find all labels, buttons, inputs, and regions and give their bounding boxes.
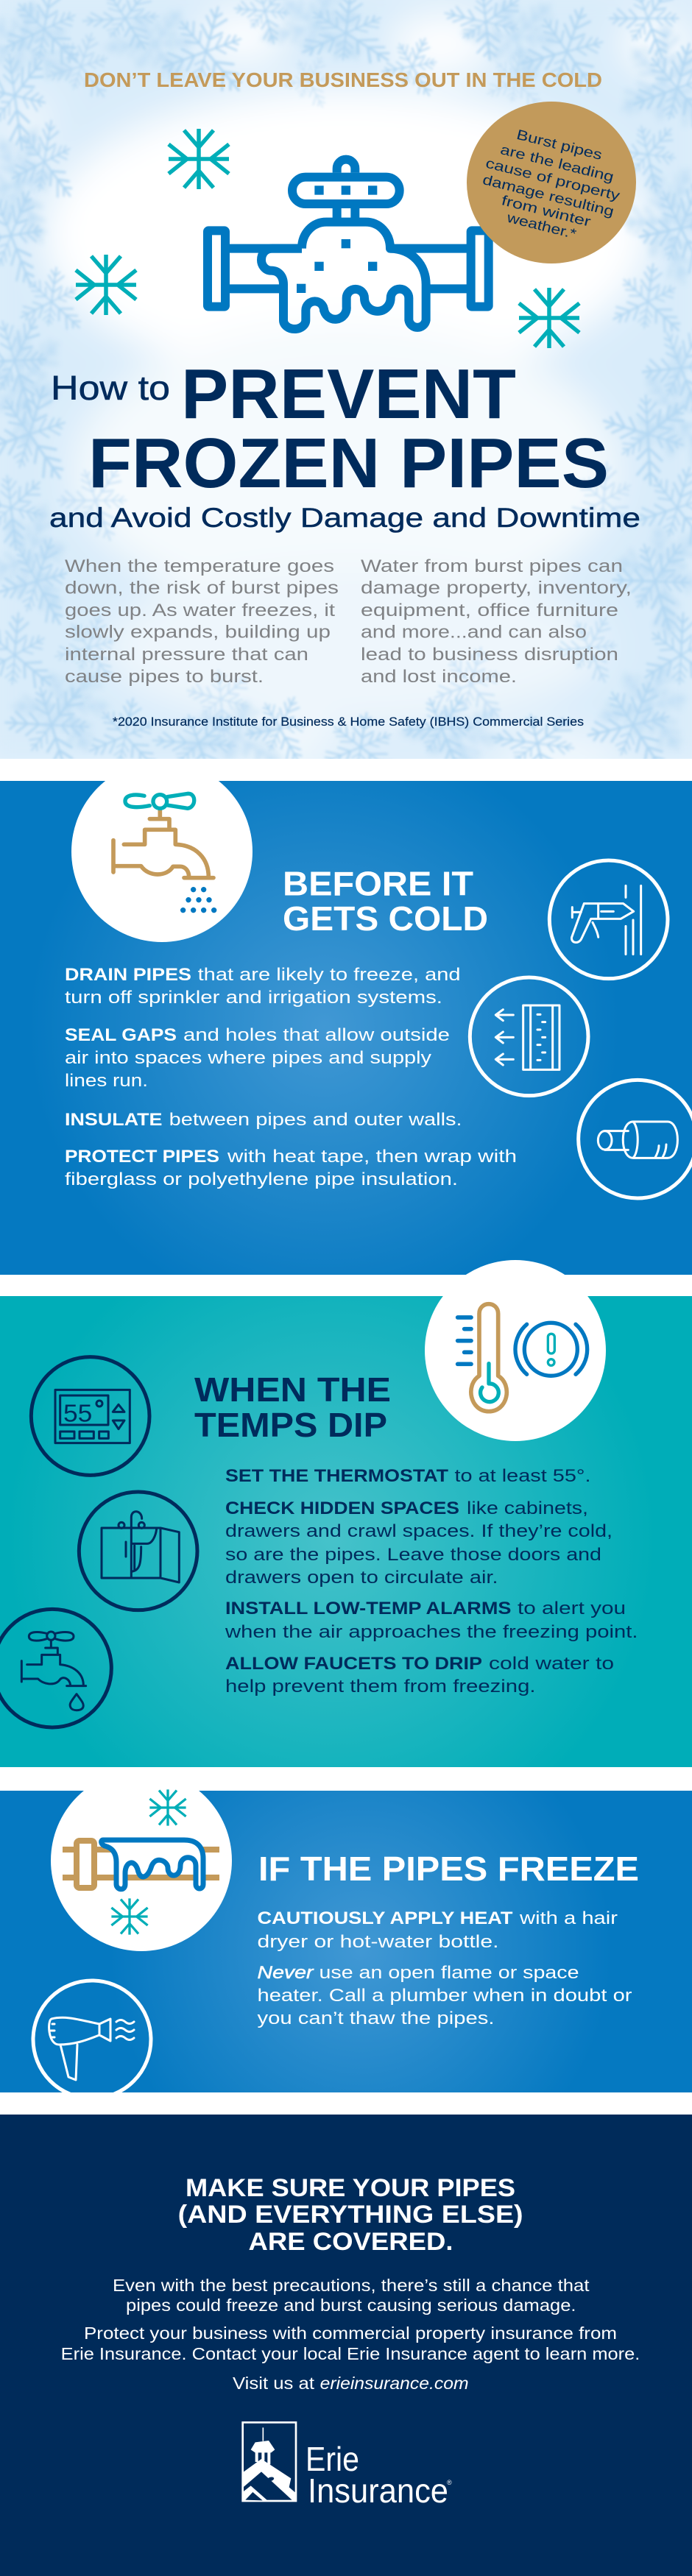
- text block: intro left: When the temperature goes: [65, 556, 334, 576]
- heading: WHEN THE: [194, 1370, 391, 1409]
- text block: coverage message: Visit us at: [233, 2374, 315, 2393]
- text block: thawing tips: with a hair: [519, 1908, 618, 1928]
- icon: thermostat: 55: [63, 1401, 92, 1428]
- text block: prevention tips: SEAL GAPS: [65, 1025, 177, 1045]
- icon: snowflake right: [519, 288, 579, 348]
- logo: Erie Insurance: Erie: [306, 2440, 359, 2478]
- text block: cold weather tips: help prevent them from freezing.: [225, 1677, 536, 1696]
- logo: Erie Insurance: ®: [447, 2479, 452, 2486]
- text block: intro right: Water from burst pipes can: [361, 556, 623, 576]
- text block: intro right: and more...and can also: [361, 623, 587, 642]
- icon: sink cabinet: [79, 1492, 197, 1610]
- text block: intro left: down, the risk of burst pipes: [65, 578, 339, 598]
- text block: coverage message: Even with the best precautions, there’s still a chance that: [113, 2276, 590, 2295]
- heading: (AND EVERYTHING ELSE): [178, 2201, 523, 2229]
- text block: thawing tips: [258, 1908, 632, 2028]
- callout: burst pipes statistic: damage resulting: [481, 172, 615, 220]
- panel: snowy header: [0, 0, 692, 790]
- text block: intro left: [65, 556, 339, 687]
- text block: intro left: goes up. As water freezes, it: [65, 601, 335, 620]
- title: PREVENT: [181, 355, 516, 434]
- icon: hair dryer: [33, 1981, 151, 2098]
- tagline: DON’T LEAVE YOUR BUSINESS OUT IN THE COLD: [84, 68, 602, 91]
- text block: cold weather tips: so are the pipes. Leave those doors and: [225, 1545, 601, 1565]
- heading: IF THE PIPES FREEZE: [258, 1850, 639, 1888]
- text block: prevention tips: INSULATE: [65, 1110, 162, 1130]
- text block: cold weather tips: INSTALL LOW-TEMP ALARMS: [225, 1599, 511, 1618]
- text block: prevention tips: DRAIN PIPES: [65, 965, 191, 985]
- text block: thawing tips: use an open flame or space: [319, 1963, 579, 1983]
- callout: burst pipes statistic: Burst pipes: [515, 127, 604, 163]
- icon: insulated pipe: [579, 1080, 692, 1198]
- text block: prevention tips: and holes that allow outside: [183, 1025, 450, 1045]
- text block: cold weather tips: drawers open to circulate air.: [225, 1568, 498, 1588]
- icon: dripping faucet: [0, 1609, 111, 1727]
- panel: before it gets cold: [0, 761, 692, 1275]
- text block: thawing tips: you can’t thaw the pipes.: [258, 2009, 495, 2028]
- text block: prevention tips: between pipes and outer walls.: [169, 1110, 462, 1130]
- text block: thawing tips: dryer or hot-water bottle.: [258, 1932, 499, 1952]
- text block: prevention tips: air into spaces where pipes and supply: [65, 1048, 432, 1068]
- title: [49, 355, 640, 533]
- text block: cold weather tips: ALLOW FAUCETS TO DRIP: [225, 1654, 482, 1674]
- text block: thawing tips: heater. Call a plumber when in doubt or: [258, 1986, 632, 2006]
- text block: intro right: and lost income.: [361, 667, 517, 687]
- heading: MAKE SURE YOUR PIPES: [186, 2174, 515, 2202]
- icon: burst pipe: [208, 160, 489, 329]
- heading: BEFORE IT: [283, 864, 473, 902]
- callout: burst pipes statistic: from winter: [500, 193, 593, 230]
- text block: prevention tips: fiberglass or polyethylene pipe insulation.: [65, 1170, 458, 1189]
- text block: thawing tips: CAUTIOUSLY APPLY HEAT: [258, 1908, 513, 1928]
- text block: intro right: [361, 556, 632, 687]
- logo: Erie Insurance: Insurance: [308, 2471, 448, 2510]
- logo: Erie Insurance: [243, 2422, 452, 2510]
- callout: burst pipes statistic: cause of property: [484, 156, 622, 204]
- callout: burst pipes statistic: are the leading: [498, 142, 615, 185]
- heading: TEMPS DIP: [194, 1406, 387, 1444]
- text block: cold weather tips: [225, 1466, 638, 1696]
- text block: intro left: cause pipes to burst.: [65, 667, 264, 687]
- title: How to: [51, 369, 170, 407]
- text block: prevention tips: with heat tape, then wrap with: [227, 1147, 517, 1167]
- panel: when the temps dip: [0, 1260, 692, 1767]
- text block: cold weather tips: like cabinets,: [467, 1498, 588, 1518]
- heading: GETS COLD: [283, 899, 488, 938]
- panel: coverage call to action: [0, 2115, 692, 2576]
- footnote: *2020 Insurance Institute for Business & Home Safety (IBHS) Commercial Series: [113, 715, 584, 729]
- icon: thermostat: [31, 1357, 149, 1475]
- title: FROZEN PIPES: [88, 424, 609, 503]
- icon: thermometer and alarm in white circle: [425, 1260, 606, 1441]
- text block: cold weather tips: to at least 55°.: [455, 1466, 590, 1486]
- text block: prevention tips: [65, 965, 517, 1189]
- text block: cold weather tips: cold water to: [489, 1654, 614, 1674]
- heading: ARE COVERED.: [249, 2228, 453, 2256]
- text block: prevention tips: PROTECT PIPES: [65, 1147, 219, 1167]
- icon: snowflake top: [169, 129, 229, 189]
- callout: burst pipes statistic: [467, 102, 636, 263]
- text block: coverage message: Protect your business with commercial property insurance from: [84, 2324, 617, 2343]
- icon: snowflake left: [76, 255, 136, 315]
- text block: prevention tips: lines run.: [65, 1071, 148, 1091]
- text block: cold weather tips: to alert you: [518, 1599, 626, 1618]
- frost background: [0, 0, 692, 790]
- title: and Avoid Costly Damage and Downtime: [49, 503, 640, 533]
- text block: cold weather tips: when the air approaches the freezing point.: [225, 1622, 638, 1642]
- icon: caulk gun: [549, 860, 668, 979]
- panel: if the pipes freeze: [0, 1770, 692, 2098]
- heading: [194, 1370, 391, 1444]
- callout: burst pipes statistic: weather.*: [504, 210, 578, 242]
- text block: coverage message: [61, 2276, 640, 2393]
- icon: wall insulation: [470, 977, 588, 1096]
- text block: cold weather tips: drawers and crawl spaces. If they’re cold,: [225, 1521, 612, 1541]
- heading: [283, 864, 488, 938]
- text block: intro left: internal pressure that can: [65, 645, 308, 665]
- text block: coverage message: erieinsurance.com: [320, 2374, 469, 2393]
- text block: thawing tips: Never: [258, 1963, 314, 1983]
- text block: intro right: lead to business disruption: [361, 645, 618, 665]
- icon: frozen pipe in white circle: [51, 1770, 232, 1951]
- text block: prevention tips: turn off sprinkler and irrigation systems.: [65, 988, 442, 1008]
- text block: intro right: damage property, inventory,: [361, 578, 632, 598]
- text block: intro left: slowly expands, building up: [65, 623, 331, 642]
- text block: coverage message: Erie Insurance. Contact your local Erie Insurance agent to learn more.: [61, 2344, 640, 2363]
- icon: faucet in white circle: [71, 761, 253, 942]
- text block: cold weather tips: SET THE THERMOSTAT: [225, 1466, 448, 1486]
- text block: coverage message: pipes could freeze and burst causing serious damage.: [126, 2296, 576, 2315]
- text block: prevention tips: that are likely to freeze, and: [198, 965, 461, 985]
- text block: cold weather tips: CHECK HIDDEN SPACES: [225, 1498, 459, 1518]
- heading: [178, 2174, 523, 2256]
- text block: intro right: equipment, office furniture: [361, 601, 618, 620]
